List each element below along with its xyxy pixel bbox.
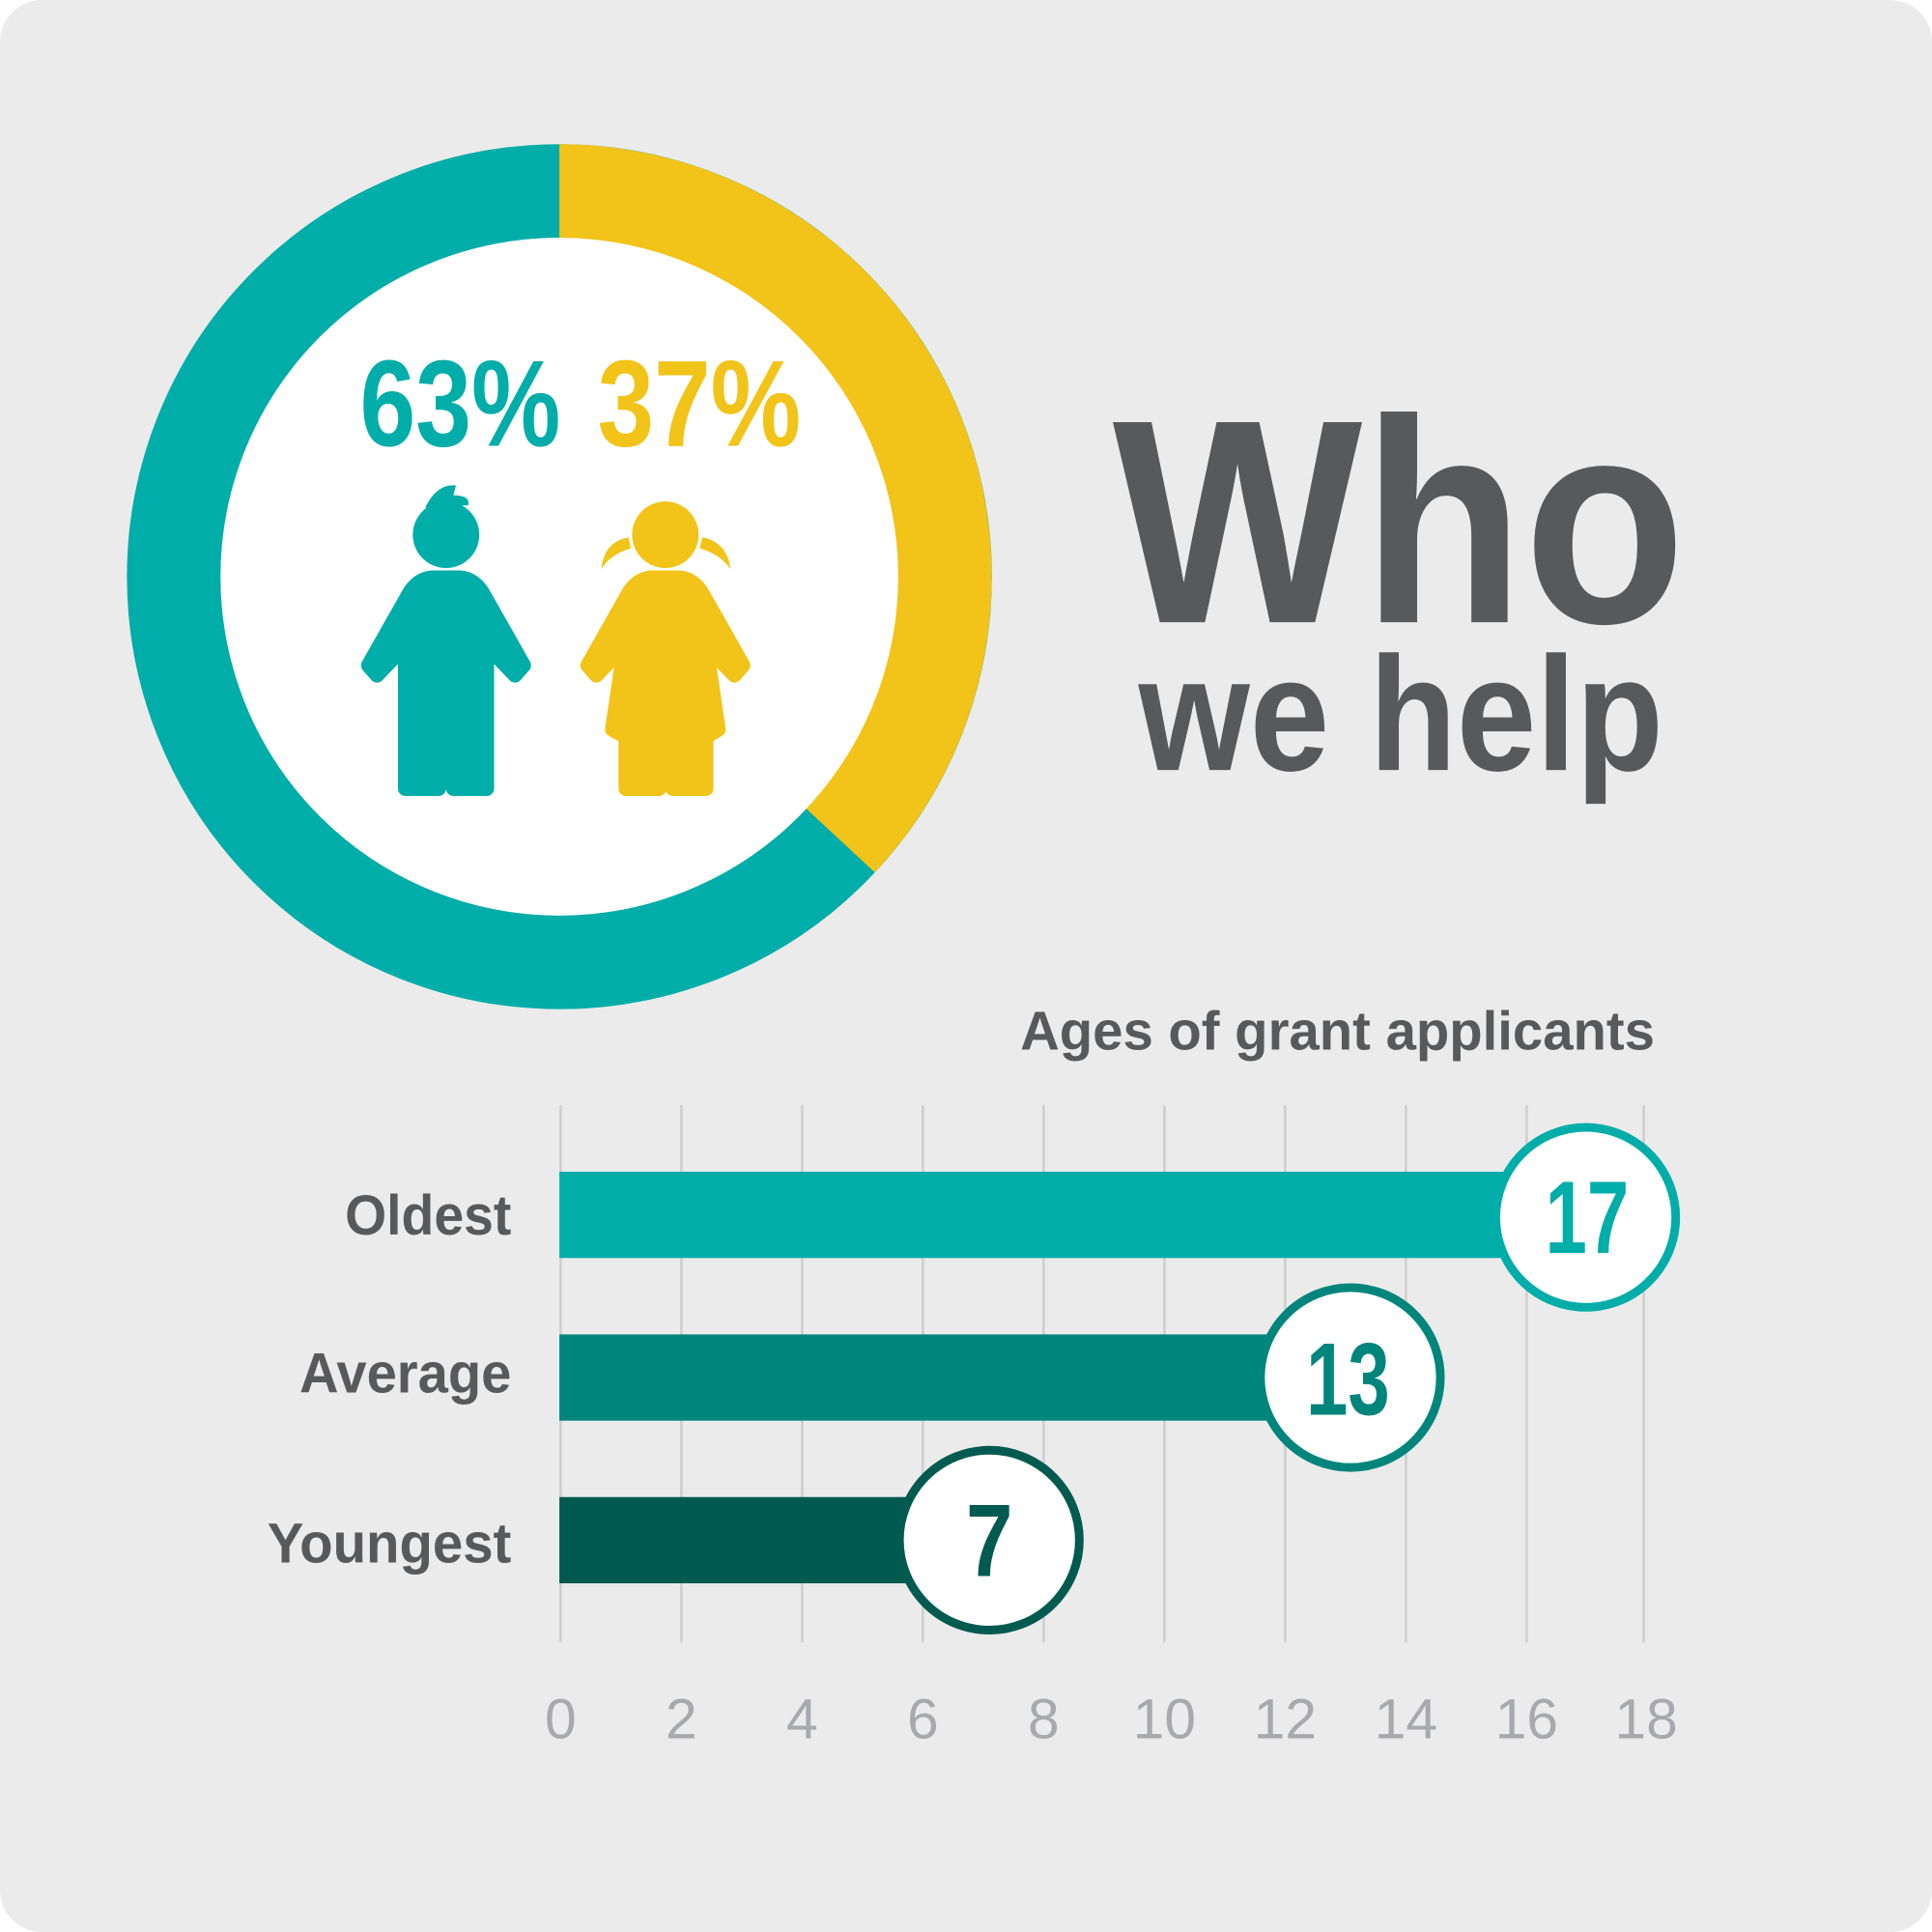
bar: Youngest (268, 1450, 1079, 1631)
percentage boys: 63% (359, 336, 560, 473)
bar: Youngest: 7 (966, 1482, 1012, 1598)
x-axis labels: 2 (666, 1689, 697, 1751)
x-axis labels: 10 (1133, 1689, 1196, 1751)
chart subtitle: Ages of grant applicants (1020, 1001, 1655, 1062)
icon: girl (587, 501, 743, 788)
x-axis labels: 12 (1254, 1689, 1317, 1751)
title: we help: we help (1138, 623, 1663, 805)
bar: Oldest: 17 (1545, 1159, 1629, 1275)
bar: Oldest (345, 1127, 1676, 1307)
bar: Average (299, 1288, 1440, 1467)
icon: boy (368, 485, 524, 788)
donut chart: gender split (174, 144, 992, 962)
bar: Average: 13 (1306, 1321, 1390, 1436)
x-axis labels: 6 (907, 1689, 939, 1751)
percentage girls: 37% (598, 336, 801, 473)
x-axis labels: 14 (1375, 1689, 1437, 1751)
x-axis labels: 16 (1495, 1689, 1558, 1751)
x-axis labels: 4 (786, 1689, 818, 1751)
gridlines (560, 1105, 1644, 1642)
x-axis labels: 18 (1614, 1689, 1678, 1751)
x-axis labels: 0 (545, 1689, 577, 1751)
bar: Average: Average (299, 1342, 511, 1405)
x-axis labels: 8 (1028, 1689, 1060, 1751)
bar: Youngest: Youngest (268, 1512, 511, 1575)
bar: Oldest: Oldest (345, 1184, 511, 1247)
x-axis labels (545, 1689, 1678, 1751)
title: Who: Who (1113, 358, 1686, 684)
